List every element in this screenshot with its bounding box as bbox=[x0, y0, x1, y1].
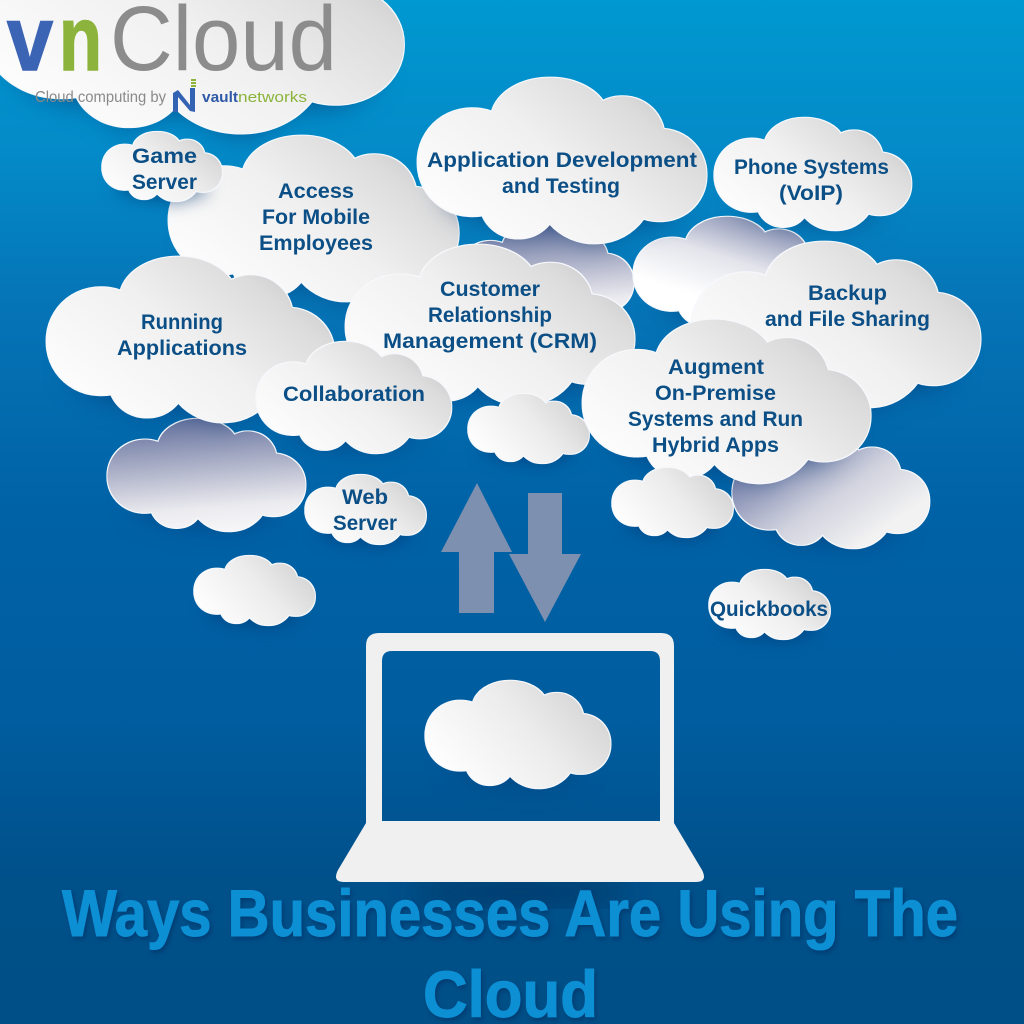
cloud: Customer Relationship Management bbox=[346, 245, 635, 405]
arrow: down bbox=[509, 493, 581, 622]
cloud: Application Development and Testing: and Testing bbox=[502, 175, 620, 198]
cloud: Running Applications bbox=[47, 257, 335, 422]
cloud: Running Applications: Running bbox=[141, 311, 223, 334]
cloud: small blank left bbox=[194, 556, 315, 625]
cloud: Access For Mobile Employees: For Mobile bbox=[262, 206, 370, 229]
cloud on laptop screen bbox=[425, 681, 610, 788]
cloud: shaded back left bbox=[107, 419, 305, 531]
cloud: Collaboration: Collaboration bbox=[283, 383, 425, 406]
cloud: Augment On-Premise Systems and Run Hybrid Apps bbox=[583, 320, 871, 483]
cloud: Game Server: Game bbox=[132, 145, 197, 168]
cloud: Access For Mobile Employees: Employees bbox=[259, 232, 373, 255]
cloud: Augment On-Premise Systems and Run Hybrid Apps: On-Premise bbox=[655, 382, 776, 405]
cloud: Phone Systems (VoIP): (VoIP) bbox=[779, 182, 843, 205]
cloud: Application Development and Testing: Application Development bbox=[427, 149, 697, 172]
cloud: Game Server: Server bbox=[132, 171, 197, 194]
vaultnetworks name: networks bbox=[238, 89, 307, 106]
cloud: logo bbox=[0, 0, 404, 134]
cloud: Backup and File Sharing: and File Sharing bbox=[765, 308, 930, 331]
cloud: shaded back lower right bbox=[732, 435, 929, 548]
cloud: Customer Relationship Management: Customer bbox=[440, 278, 540, 301]
laptop bbox=[336, 633, 704, 882]
cloud: Augment On-Premise Systems and Run Hybrid Apps: Systems and Run bbox=[628, 408, 803, 431]
logo tagline: Cloud computing by bbox=[35, 89, 166, 106]
cloud: Quickbooks: Quickbooks bbox=[710, 598, 828, 621]
cloud: Access For Mobile Employees bbox=[169, 136, 459, 301]
icon: vault networks mark bbox=[173, 79, 196, 112]
cloud: Backup and File Sharing bbox=[692, 242, 981, 407]
logo wordmark vnCloud bbox=[7, 0, 337, 90]
cloud: shaded back centre bbox=[457, 222, 634, 325]
cloud: Quickbooks bbox=[709, 570, 830, 639]
cloud: Running Applications: Applications bbox=[117, 337, 247, 360]
cloud: Backup and File Sharing: Backup bbox=[808, 282, 887, 305]
vaultnetworks name bbox=[202, 89, 307, 106]
cloud: Web Server bbox=[305, 475, 426, 544]
cloud: small blank right bbox=[612, 468, 733, 537]
cloud: shaded back right bbox=[633, 217, 838, 329]
cloud: Augment On-Premise Systems and Run Hybrid Apps: Augment bbox=[668, 356, 764, 379]
cloud: Phone Systems (VoIP): Phone Systems bbox=[734, 156, 889, 179]
cloud: Customer Relationship Management: Relationship bbox=[428, 304, 552, 327]
cloud: Web Server: Web bbox=[342, 486, 388, 509]
cloud: small blank centre bbox=[468, 394, 589, 463]
cloud: Web Server: Server bbox=[333, 512, 397, 535]
vaultnetworks name: vault bbox=[202, 89, 238, 106]
cloud: Application Development and Testing bbox=[418, 78, 707, 243]
cloud: Access For Mobile Employees: Access bbox=[278, 180, 354, 203]
arrow: up bbox=[441, 483, 512, 613]
cloud: Augment On-Premise Systems and Run Hybrid Apps: Hybrid Apps bbox=[652, 434, 779, 457]
cloud: Game Server bbox=[102, 132, 222, 201]
cloud: Phone Systems (VoIP) bbox=[714, 118, 911, 230]
cloud: Collaboration bbox=[256, 342, 451, 453]
title bbox=[62, 876, 958, 1024]
cloud: Customer Relationship Management: Management (CRM) bbox=[383, 330, 597, 353]
